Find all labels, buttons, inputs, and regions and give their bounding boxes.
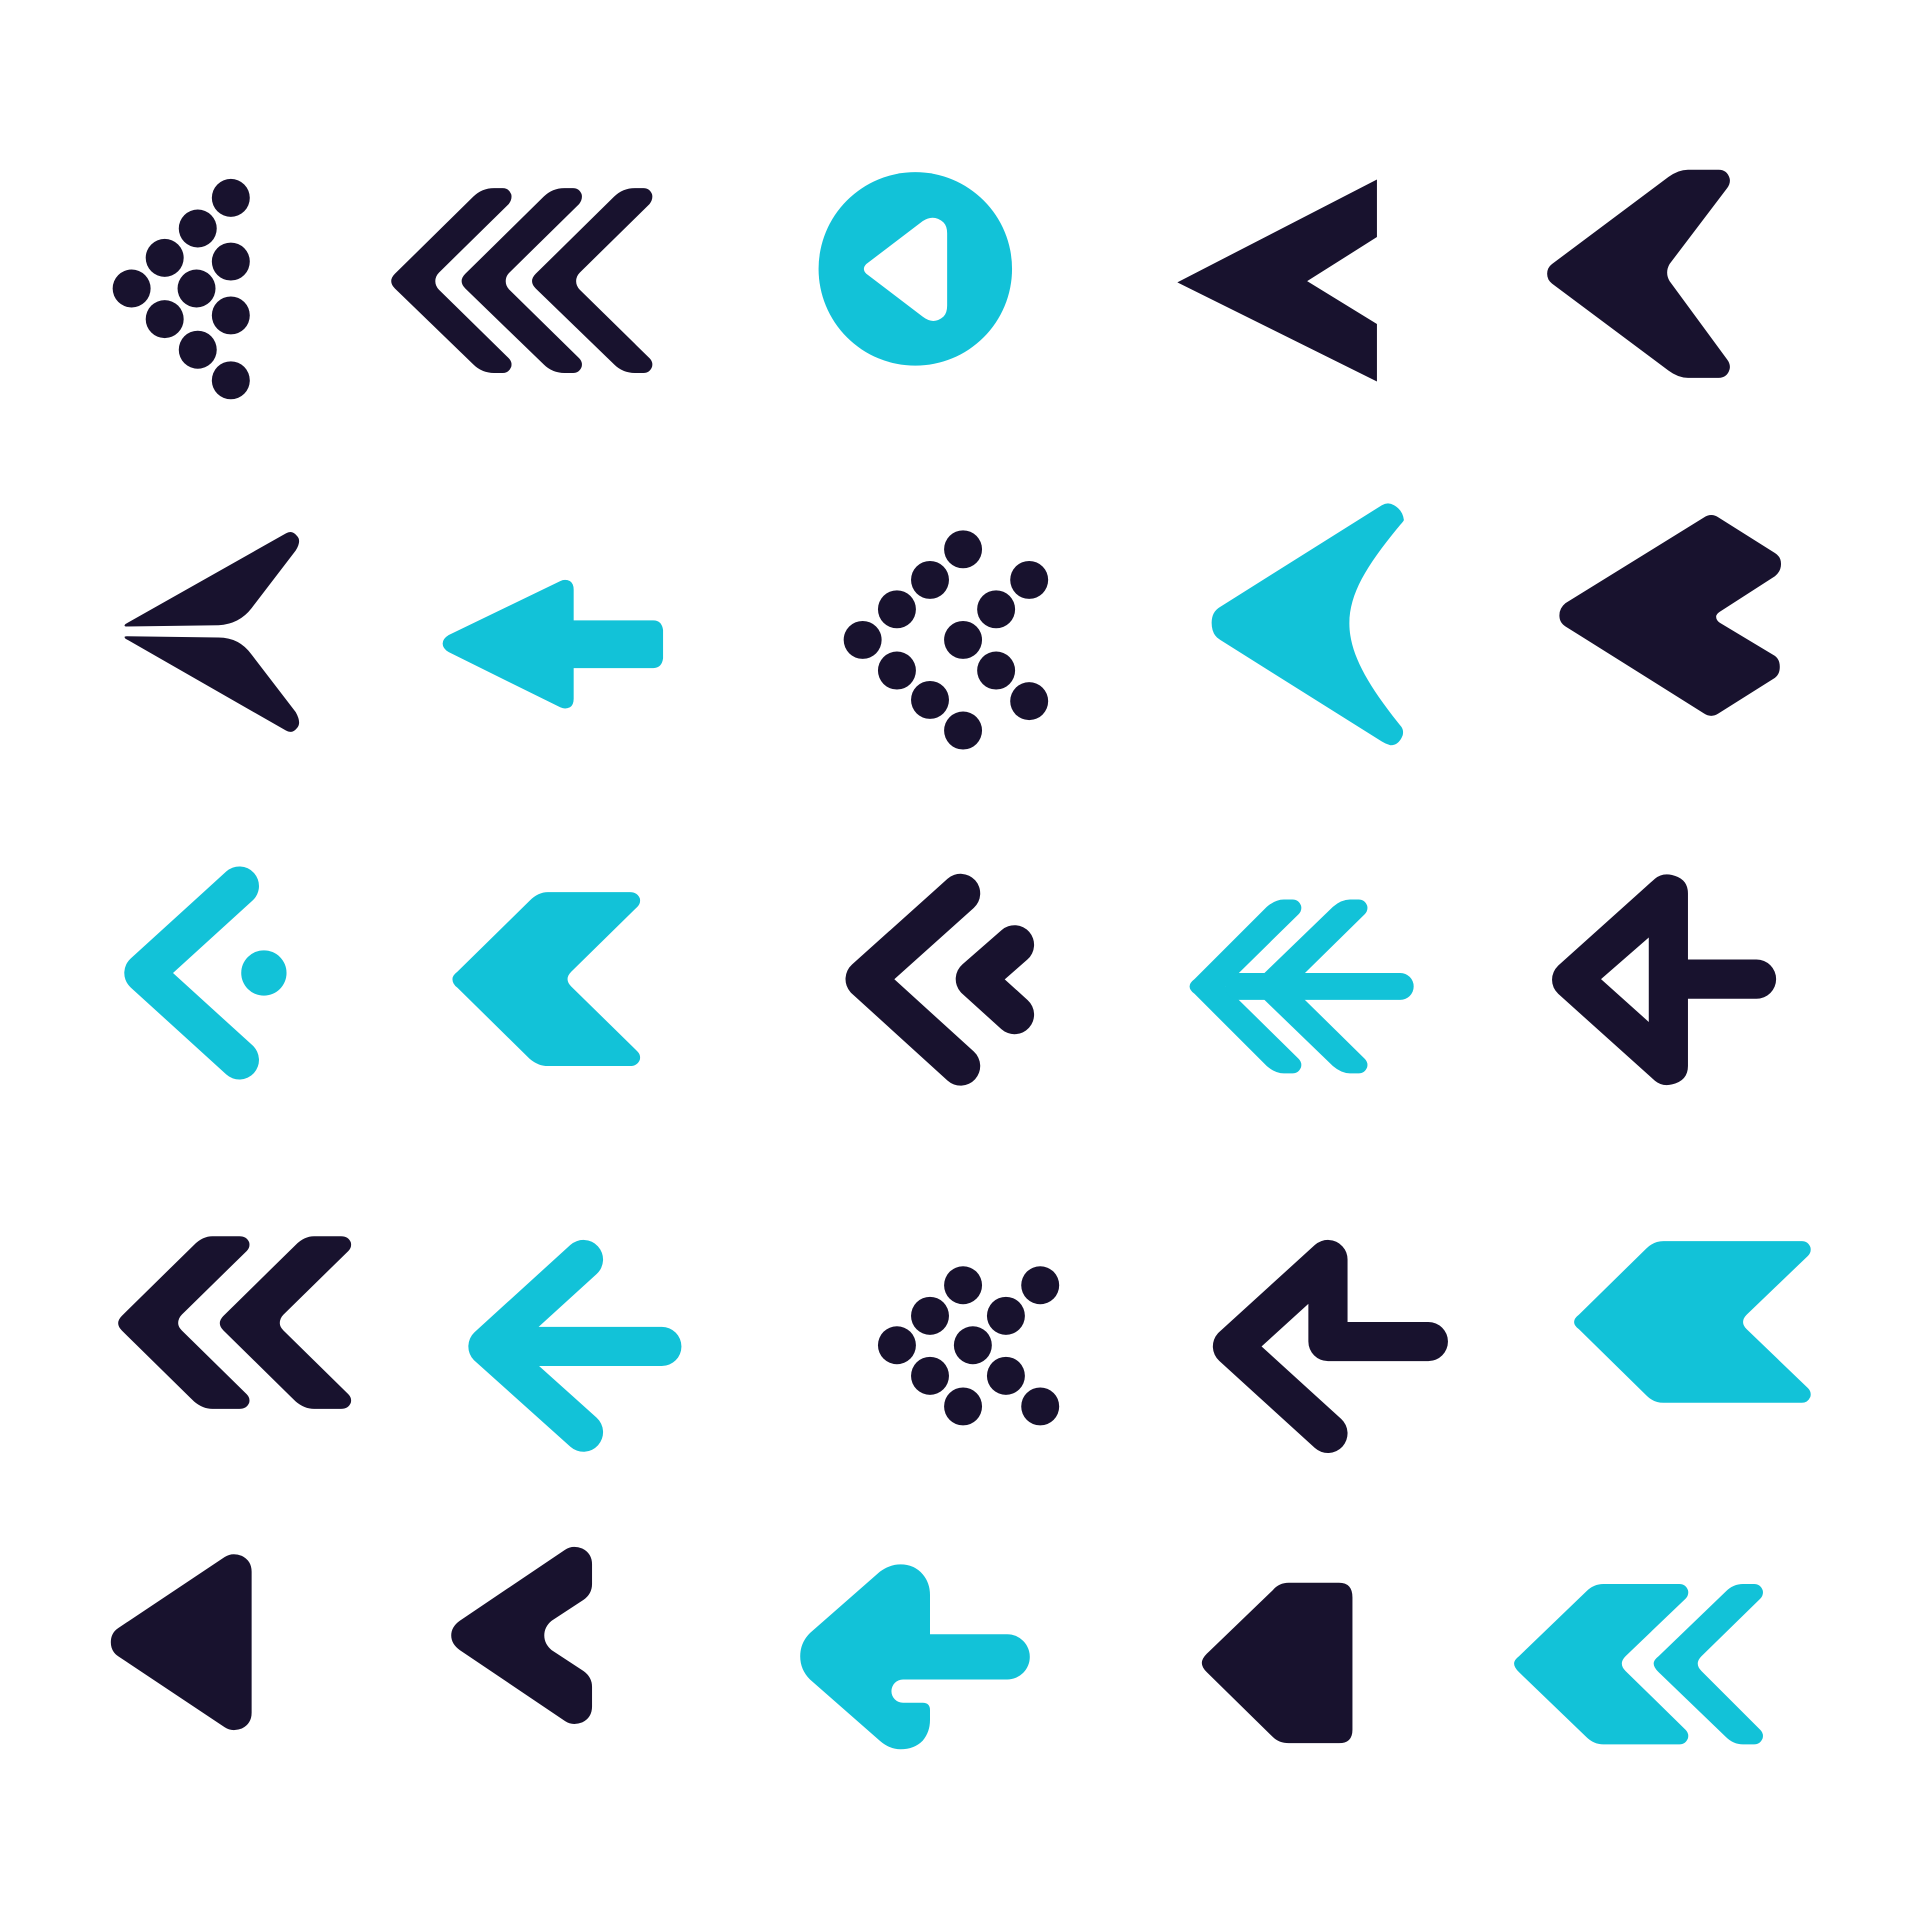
icon: wide and thin double chevron (1514, 1584, 1763, 1744)
icon: outlined triangle arrow with tail (1552, 874, 1776, 1085)
icon: rounded boomerang arrowhead (1547, 170, 1730, 378)
icon: solid rounded triangle (111, 1554, 252, 1730)
icon: wide banner chevron (1574, 1241, 1811, 1403)
icon: triple chevron (391, 188, 652, 373)
icon: double arrow with shaft (1190, 900, 1414, 1073)
icon: double fat chevron (118, 1236, 351, 1409)
icon: dotted chevron arrow (844, 530, 1048, 750)
icon: large and small chevrons (865, 893, 1014, 1066)
icon: solid block arrow (443, 580, 663, 708)
icon: split paper plane (125, 532, 299, 732)
icon: chevron with dot (144, 886, 287, 1060)
icon: dotted triangle arrow (113, 179, 250, 399)
icon: line arrow (488, 1260, 662, 1432)
icon: pentagon tag arrow (1202, 1583, 1352, 1743)
icon: circle with triangle (819, 172, 1012, 366)
icon: dotted double chevron (878, 1266, 1059, 1425)
icon: rounded arrow with slot (800, 1564, 1030, 1749)
icon: fat chevron (452, 892, 640, 1066)
icon: wide notched arrowhead (1559, 515, 1781, 716)
icon: chevron with bent tail (1232, 1260, 1428, 1433)
icon: curved arrowhead (1212, 503, 1404, 745)
icon: notched rounded arrowhead (451, 1547, 592, 1724)
icon: sharp arrowhead (1177, 180, 1377, 382)
